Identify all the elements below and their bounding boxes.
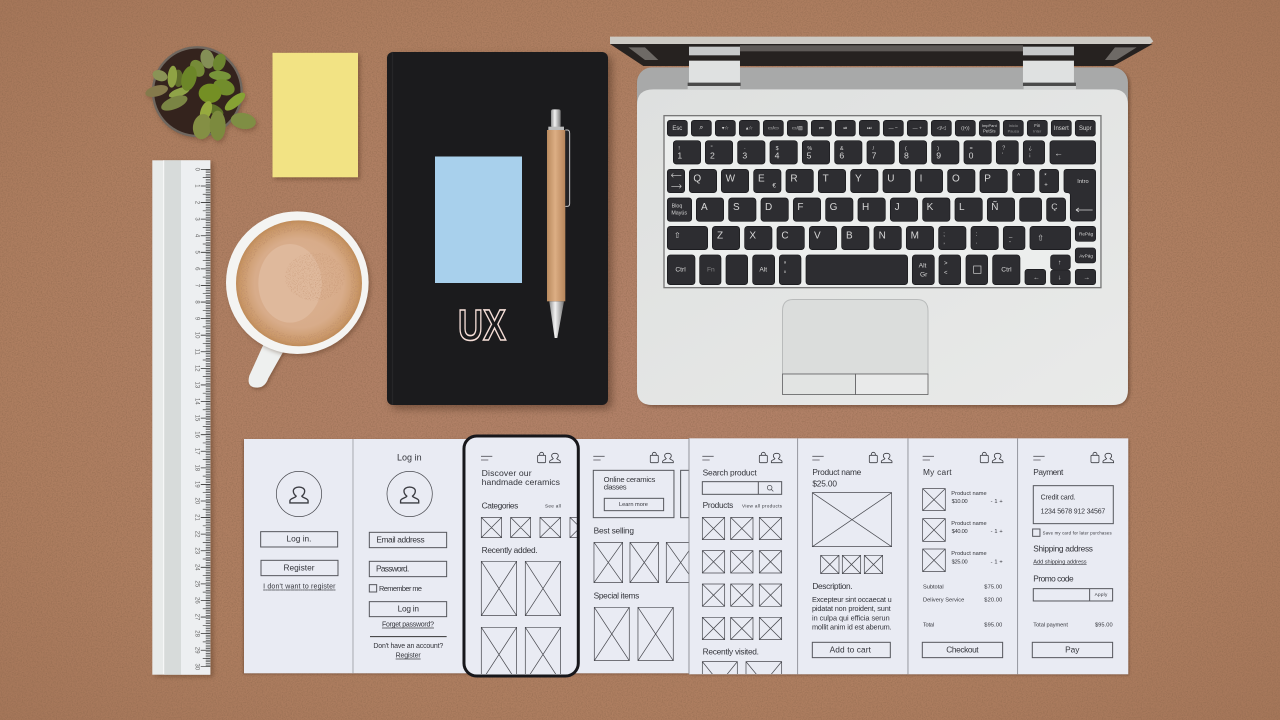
- wireframe screen: log in form: [369, 453, 447, 660]
- wireframe screen: my cart: $10.00: [952, 499, 968, 505]
- bottom key row: [667, 248, 1096, 285]
- wireframe screen: browse: classes: [604, 483, 627, 492]
- function key row: Insert: [1054, 126, 1069, 132]
- ASDF key row: A: [701, 202, 708, 213]
- function key row: Pausa: [1008, 129, 1020, 134]
- laptop lid hinge edge: [610, 37, 1153, 66]
- wireframe screen: log in form: Forget password?: [382, 622, 434, 629]
- ruler numbers: 12: [194, 365, 200, 372]
- wireframe screen: highlighted phone home: Recently added.: [482, 545, 538, 555]
- ASDF key row: [667, 198, 1066, 221]
- QWERTY key row: [667, 169, 1096, 221]
- ASDF key row: H: [862, 202, 869, 213]
- laptop: [610, 37, 1153, 405]
- ruler numbers: 15: [194, 415, 200, 422]
- UX logo: UX: [458, 301, 506, 350]
- bottom key row: º: [784, 270, 786, 276]
- wireframe screen: payment: Shipping address: [1033, 544, 1093, 554]
- keyboard: [664, 116, 1101, 288]
- paper strip: [244, 439, 690, 673]
- ruler numbers: 4: [194, 234, 200, 238]
- wireframe screen: welcome: I don't want to register: [263, 584, 336, 591]
- ruler numbers: 19: [194, 481, 200, 488]
- bottom key row: ª: [784, 261, 786, 267]
- wireframe screen: payment: $95.00: [1095, 623, 1113, 629]
- wireframe screen: my cart: Product name: [951, 551, 987, 557]
- ruler numbers: 28: [194, 630, 200, 638]
- wireframe screen: browse: [593, 452, 701, 661]
- wireframe screen: log in form: Don't have an account?: [373, 643, 443, 650]
- wireframe screen: product detail: Product name: [812, 467, 862, 477]
- ZXCV key row: Z: [717, 230, 723, 241]
- plant in glass pot: [144, 47, 257, 141]
- wireframe screen: log in form: Log in: [397, 453, 422, 463]
- number key row: ): [937, 146, 939, 152]
- QWERTY key row: E: [758, 173, 765, 184]
- function key row: Supr: [1079, 126, 1092, 132]
- function key row: ImpPant: [982, 123, 998, 128]
- ruler numbers: 8: [194, 300, 200, 304]
- wireframe screen: welcome: Log in.: [286, 534, 312, 544]
- bottom key row: Ctrl: [675, 267, 686, 274]
- ASDF key row: S: [733, 202, 740, 213]
- wireframe screen: log in form: Log in: [398, 603, 419, 613]
- QWERTY key row: ^: [1017, 173, 1020, 179]
- wireframe screen: my cart: $40.00: [952, 529, 968, 535]
- yellow sticky note: [272, 53, 358, 177]
- wireframe screen: payment: Save my card for later purchases: [1043, 530, 1112, 535]
- ZXCV key row: ;: [943, 232, 945, 238]
- number key row: 5: [807, 151, 812, 161]
- ZXCV key row: N: [879, 230, 886, 241]
- ZXCV key row: :: [976, 232, 978, 238]
- wireframe screen: product detail: Add to cart: [830, 645, 872, 655]
- bottom key row: Fn: [707, 267, 715, 274]
- wireframe screen: my cart: Product name: [951, 491, 987, 497]
- ZXCV key row: ⇧: [1037, 234, 1044, 243]
- ZXCV key row: -: [1009, 239, 1011, 245]
- ruler numbers: 2: [194, 201, 200, 205]
- function key row: — +: [913, 125, 922, 131]
- ruler numbers: 9: [194, 317, 200, 321]
- ZXCV key row: ⇧: [674, 231, 681, 240]
- ruler numbers: 23: [194, 547, 200, 555]
- ruler numbers: 27: [194, 614, 200, 621]
- wireframe screen: log in form: Email address: [376, 535, 425, 545]
- wireframe screen: welcome: [261, 439, 353, 673]
- wireframe screen: my cart: Delivery Service: [923, 597, 964, 603]
- bottom key row: Ctrl: [1001, 267, 1012, 274]
- ruler numbers: 6: [194, 267, 200, 271]
- QWERTY key row: O: [952, 173, 960, 184]
- ZXCV key row: ,: [943, 239, 945, 245]
- ruler numbers: 18: [194, 464, 200, 472]
- function key row: PetSis: [983, 129, 996, 134]
- wireframe screen: highlighted phone home: [464, 436, 590, 682]
- wireframe screen: my cart: - 1 +: [991, 559, 1003, 565]
- wireframe screen: my cart: - 1 +: [991, 529, 1003, 535]
- wireframes left half: [244, 436, 701, 682]
- wireframe screen: welcome: Register: [283, 563, 315, 573]
- ZXCV key row: V: [814, 230, 821, 241]
- wireframe screen: my cart: $25.00: [952, 559, 968, 565]
- number key row: !: [678, 146, 680, 152]
- ASDF key row: K: [927, 202, 934, 213]
- wireframe screen: payment: [1032, 452, 1114, 658]
- QWERTY key row: Y: [855, 173, 862, 184]
- QWERTY key row: *: [1044, 173, 1047, 179]
- ruler numbers: 1: [194, 184, 200, 188]
- blue sticky note: [435, 156, 522, 283]
- wireframe screen: search products: View all products: [742, 504, 783, 509]
- wireframe screen: browse: Best selling: [594, 526, 634, 536]
- ruler numbers: 14: [194, 398, 200, 405]
- wireframe screen: search products: Recently visited.: [703, 647, 759, 657]
- wireframe screen: payment: Promo code: [1033, 574, 1074, 584]
- number key row: ?: [1002, 145, 1005, 151]
- ASDF key row: D: [765, 202, 772, 213]
- wireframe screen: payment: Add shipping address: [1033, 559, 1087, 565]
- wireframe screen: product detail: pidatat non proident, sunt: [812, 604, 891, 613]
- number key row: 6: [839, 151, 844, 161]
- function key row: ◁/◁: [937, 125, 946, 131]
- number key row: (: [905, 146, 907, 152]
- notebook: [387, 52, 608, 405]
- bottom key row: >: [944, 261, 948, 267]
- wireframe screen: product detail: [812, 452, 892, 658]
- wireframe screen: my cart: Total: [923, 622, 934, 628]
- ASDF key row: Ç: [1051, 201, 1058, 211]
- bottom key row: Alt: [919, 262, 927, 269]
- function key row: Inicio: [1009, 123, 1019, 128]
- ruler numbers: 13: [194, 382, 200, 389]
- bottom key row: AvPág: [1079, 254, 1093, 259]
- function key row: ⏭: [867, 125, 872, 131]
- ZXCV key row: M: [911, 230, 919, 241]
- ruler numbers: 16: [194, 431, 200, 439]
- wireframe screen: my cart: $95.00: [984, 622, 1002, 628]
- trackpad: [782, 300, 928, 394]
- number key row: %: [807, 146, 812, 152]
- function key row: ⌕: [699, 122, 703, 131]
- panel dividers: [689, 438, 1018, 674]
- ruler numbers: 24: [194, 564, 200, 571]
- function key row: Esc: [672, 126, 682, 132]
- number key row: 3: [742, 151, 747, 161]
- ruler numbers: 26: [194, 597, 200, 604]
- QWERTY key row: I: [920, 173, 922, 184]
- ruler numbers: 0: [194, 168, 200, 172]
- QWERTY key row: +: [1044, 183, 1048, 189]
- ruler numbers: 20: [194, 498, 200, 505]
- number key row: 2: [710, 151, 715, 161]
- wireframe screen: log in form: Register: [396, 653, 421, 660]
- wireframe screen: product detail: Excepteur sint occaecat u: [812, 595, 892, 604]
- wireframe screen: highlighted phone home: Categories: [482, 500, 518, 510]
- function key row: ⏯: [843, 125, 847, 131]
- QWERTY key row: R: [790, 173, 798, 184]
- function key row: ▭/▨: [792, 125, 803, 131]
- number key row: 0: [969, 151, 974, 161]
- QWERTY key row: €: [772, 182, 776, 189]
- number key row: ·: [744, 146, 746, 152]
- QWERTY key row: W: [726, 173, 736, 184]
- wireframe screen: search products: Search product: [703, 468, 757, 478]
- ruler numbers: 22: [194, 531, 200, 538]
- ruler: [152, 160, 210, 675]
- wireframe screen: my cart: Subtotal: [923, 585, 944, 591]
- wireframe screen: log in form: Password.: [376, 563, 409, 573]
- bottom key row: →: [1083, 274, 1090, 281]
- number key row: ←: [1054, 148, 1063, 158]
- hinges: [688, 47, 1076, 89]
- ASDF key row: J: [895, 202, 900, 213]
- number key row: 7: [872, 151, 877, 161]
- wireframe screen: my cart: My cart: [923, 467, 952, 477]
- wireframe screen: highlighted phone home: Discover our: [482, 468, 532, 478]
- ZXCV key row: .: [976, 239, 978, 245]
- ruler numbers: 5: [194, 251, 200, 255]
- ruler numbers: 29: [194, 647, 200, 654]
- wireframe screen: my cart: [922, 452, 1003, 658]
- ZXCV key row: _: [1008, 232, 1013, 238]
- ASDF key row: G: [830, 202, 838, 213]
- bottom key row: ←: [1033, 274, 1040, 281]
- QWERTY key row: U: [887, 173, 895, 184]
- QWERTY key row: T: [823, 173, 829, 184]
- ASDF key row: L: [959, 202, 965, 213]
- number key row: ¿: [1029, 145, 1032, 151]
- wireframe screen: product detail: in culpa qui efficia serun: [812, 613, 890, 622]
- number key row: 9: [936, 151, 941, 161]
- QWERTY key row: Q: [693, 173, 701, 184]
- wireframe screen: my cart: $20.00: [984, 597, 1002, 603]
- wireframe screen: product detail: mollit anim id est aberum.: [812, 622, 892, 631]
- number key row: ": [711, 145, 713, 151]
- function key row: ▴☆: [746, 125, 753, 131]
- wireframe screen: payment: Payment: [1033, 467, 1064, 477]
- number key row: 4: [775, 151, 780, 161]
- ruler numbers: [194, 168, 200, 671]
- ZXCV key row: B: [846, 230, 853, 241]
- ruler numbers: 7: [194, 284, 200, 288]
- number key row: 1: [677, 151, 682, 161]
- paper strip: [689, 438, 1128, 674]
- function key row: ⏮: [819, 125, 824, 131]
- function key row: Fin: [1034, 123, 1041, 128]
- number key row: =: [970, 146, 973, 152]
- wireframe screen: search products: [702, 452, 782, 674]
- bottom key row: <: [944, 270, 948, 276]
- wireframe screen: payment: Apply: [1095, 592, 1108, 597]
- wireframe screen: highlighted phone home: handmade ceramics: [482, 477, 561, 487]
- QWERTY key row: Intro: [1077, 179, 1089, 185]
- bottom key row: ↓: [1058, 274, 1061, 281]
- number key row: ': [1002, 153, 1003, 159]
- wireframe screen: payment: Total payment: [1033, 623, 1068, 629]
- wireframe screen: my cart: $75.00: [984, 585, 1002, 591]
- ruler numbers: 10: [194, 332, 200, 339]
- laptop base: [637, 67, 1128, 405]
- wireframes right half: [688, 438, 1130, 676]
- ZXCV key row: C: [781, 230, 789, 241]
- function key row: ▭/▭: [768, 125, 779, 131]
- number key row: &: [840, 146, 844, 152]
- ASDF key row: F: [797, 202, 803, 213]
- wireframe screen: payment: Pay: [1065, 645, 1080, 655]
- ruler numbers: 17: [194, 448, 200, 455]
- ruler numbers: 25: [194, 581, 200, 588]
- wireframe screen: my cart: Product name: [951, 521, 987, 527]
- function key row: [667, 120, 1095, 136]
- ruler numbers: 11: [194, 349, 200, 355]
- function key row: ▾☆: [722, 125, 729, 131]
- coffee cup: [226, 211, 369, 388]
- bottom key row: Gr: [920, 271, 928, 278]
- QWERTY key row: P: [984, 173, 991, 184]
- wooden pen: [547, 109, 570, 338]
- wireframe screen: search products: Products: [703, 500, 733, 510]
- ZXCV key row: X: [749, 230, 756, 241]
- ASDF key row: Ñ: [991, 200, 999, 213]
- function key row: — −: [889, 125, 898, 131]
- wireframe screen: my cart: - 1 +: [991, 499, 1003, 505]
- ASDF key row: Mayús: [671, 210, 687, 216]
- ZXCV key row: [667, 226, 1096, 250]
- wireframe screen: browse: Online ceramics: [604, 475, 655, 484]
- number key row: $: [776, 146, 779, 152]
- bottom key row: Alt: [759, 267, 767, 274]
- number key row: 8: [904, 151, 909, 161]
- ruler numbers: 30: [194, 663, 200, 671]
- wireframe screen: my cart: Checkout: [946, 645, 979, 655]
- number key row: /: [873, 146, 875, 152]
- wireframe screen: payment: 1234 5678 912 34567: [1041, 509, 1105, 516]
- ASDF key row: Bloq: [672, 204, 682, 210]
- bottom key row: ↑: [1058, 259, 1061, 266]
- number key row: [673, 141, 1096, 164]
- wireframe screen: product detail: $25.00: [812, 479, 837, 489]
- number key row: ¡: [1029, 153, 1031, 159]
- wireframe screen: payment: Credit card.: [1041, 495, 1076, 502]
- ZXCV key row: RePág: [1079, 232, 1094, 237]
- function key row: Inter: [1033, 129, 1042, 134]
- wireframe screen: browse: Special items: [594, 591, 639, 601]
- ruler numbers: 3: [194, 217, 200, 221]
- wireframe screen: highlighted phone home: See all: [545, 504, 561, 509]
- function key row: ((•)): [961, 125, 970, 131]
- ruler numbers: 21: [194, 514, 200, 521]
- wireframe screen: product detail: Description.: [812, 581, 853, 591]
- wireframe screen: log in form: Remember me: [379, 584, 422, 593]
- wireframe screen: browse: Learn more: [619, 502, 648, 508]
